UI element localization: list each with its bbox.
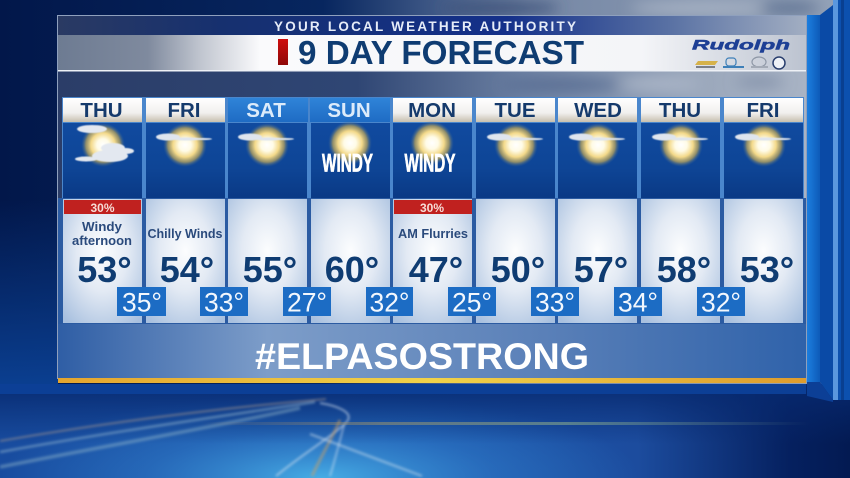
column: THU: Windy (82, 220, 122, 234)
column: FRI 2 (724, 98, 803, 323)
column: THU 2: 58° (657, 249, 711, 290)
column: SUN: SUN (327, 99, 371, 122)
low temperature badges: 33° (535, 288, 575, 318)
low temperature badges: 35° (122, 288, 162, 318)
column: SUN: 60° (325, 249, 379, 290)
column: THU: 30% (90, 201, 115, 215)
right side pillar (807, 0, 850, 402)
column: THU (63, 98, 142, 323)
column: WED: 57° (574, 249, 628, 290)
bottom banner (58, 324, 806, 378)
column: SAT (228, 98, 308, 323)
column: MON: 30% (420, 201, 444, 215)
column: FRI 2: 53° (740, 249, 794, 290)
low temperature badges: 33° (204, 288, 244, 318)
column: FRI (146, 98, 225, 323)
low temperature badges: 34° (618, 288, 658, 318)
column: THU 2: THU (659, 99, 701, 122)
column: MON: MON (408, 99, 456, 122)
column gutters (58, 97, 806, 324)
column: THU: 53° (77, 249, 132, 290)
column: THU: THU (80, 99, 123, 122)
top strip: authority tagline (58, 16, 806, 35)
low temperature badges: 25° (452, 288, 492, 318)
column: FRI 2: FRI (746, 99, 780, 122)
title: 9 DAY FORECAST (298, 34, 584, 71)
column: TUE: TUE (494, 99, 536, 122)
low temperature badges: 32° (701, 288, 741, 318)
low temperature badges: 32° (369, 288, 410, 318)
title marker (278, 39, 288, 65)
column: TUE (476, 98, 555, 323)
column: SUN (310, 98, 390, 323)
column: SUN: WINDY (322, 150, 373, 178)
column: MON (393, 98, 472, 323)
column: MON: AM Flurries (398, 227, 468, 241)
column: FRI: 54° (160, 249, 214, 290)
title band (58, 34, 806, 72)
cloud texture (500, 78, 784, 91)
column: MON: 47° (409, 249, 463, 290)
gold rule (58, 378, 806, 383)
sponsor logo: Rudolph: Rudolph (692, 36, 790, 52)
column: MON: WINDY (404, 150, 456, 178)
top strip: authority tagline: YOUR LOCAL WEATHER AUTHORITY (274, 19, 576, 34)
horizon line (200, 422, 810, 425)
column: SAT: 55° (243, 249, 297, 290)
low temperature badges: 27° (287, 288, 327, 318)
low temperature badges (117, 287, 745, 318)
column: TUE: 50° (491, 249, 545, 290)
studio floor (0, 384, 850, 478)
floor light streaks (0, 399, 422, 476)
main panel (58, 16, 806, 378)
column: WED: WED (574, 99, 622, 122)
column: WED (558, 98, 637, 323)
sponsor logo: Rudolph (692, 36, 790, 69)
column: SAT: SAT (246, 99, 286, 122)
column: FRI: FRI (167, 99, 201, 122)
hashtag: #ELPASOSTRONG (255, 336, 589, 377)
column: FRI: Chilly Winds (148, 227, 223, 241)
column: THU: afternoon (72, 234, 132, 248)
column: THU 2 (641, 98, 720, 323)
